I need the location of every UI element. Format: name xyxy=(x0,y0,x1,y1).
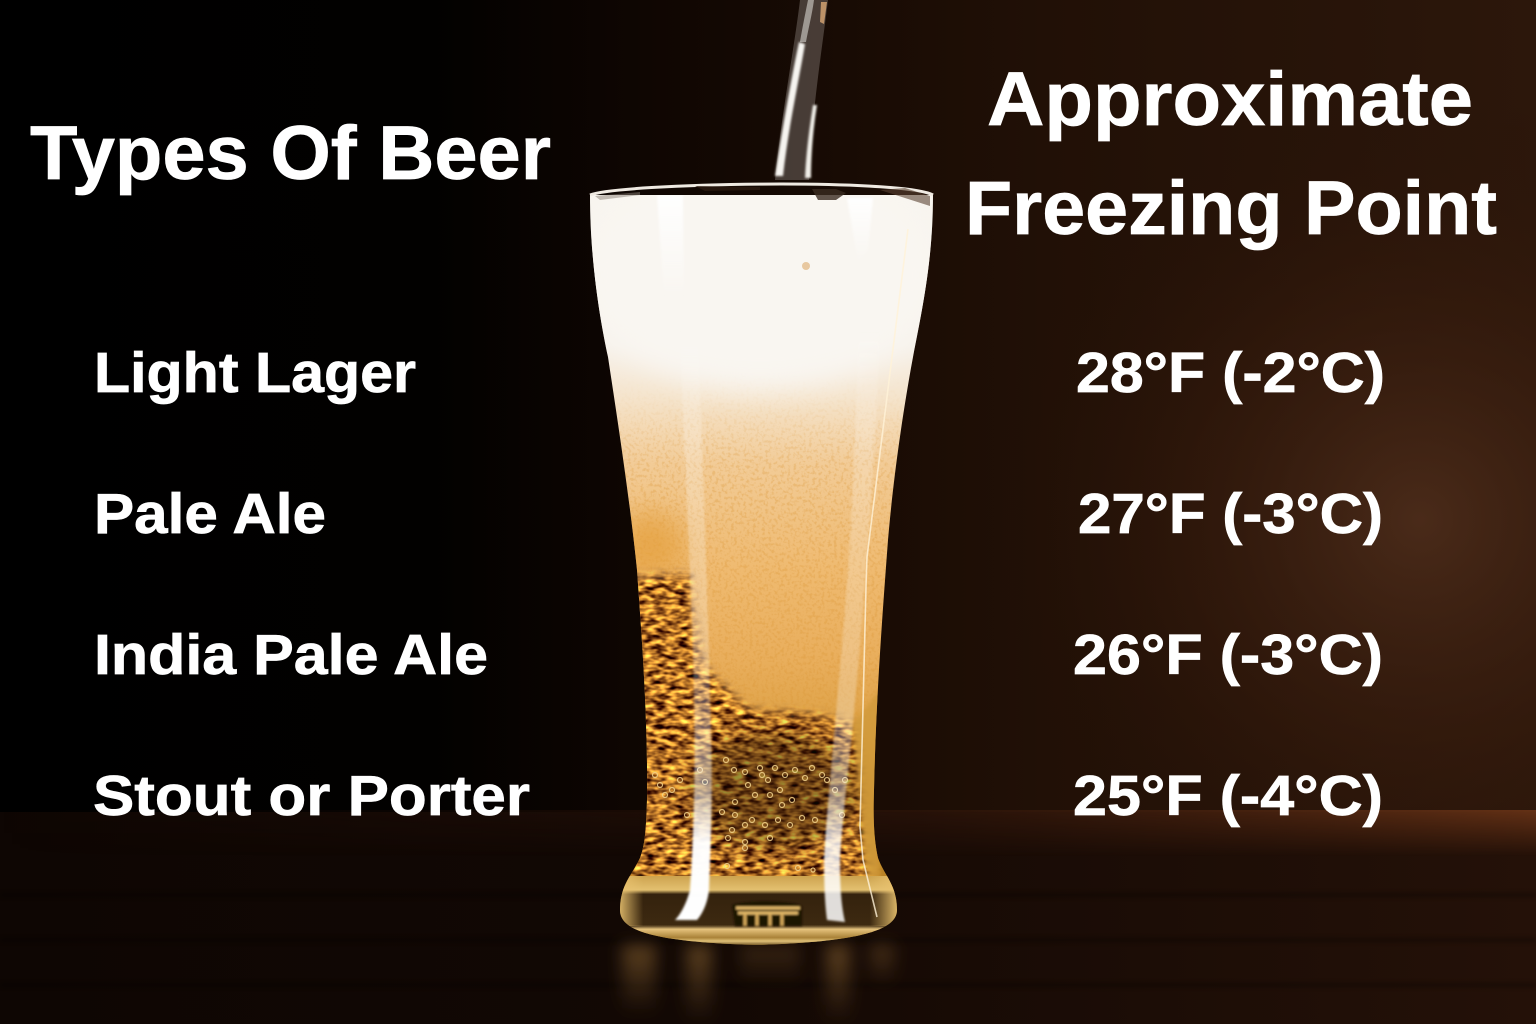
glass base xyxy=(615,876,900,946)
background: wooden table xyxy=(0,810,1536,1024)
list: freezing points: 28°F (-2°C) xyxy=(1076,341,1385,405)
icon: beer glass xyxy=(575,160,945,946)
foam spot xyxy=(802,262,810,270)
list: beer types: India Pale Ale xyxy=(94,623,488,687)
list: freezing points: 27°F (-3°C) xyxy=(1078,482,1383,546)
beer body with foam xyxy=(590,195,933,945)
deepest shadow in beer xyxy=(690,732,860,848)
list: freezing points: 25°F (-4°C) xyxy=(1073,764,1383,828)
lens detail in base xyxy=(732,901,802,926)
heading: Approximate Freezing Point xyxy=(965,57,1497,251)
base side glow xyxy=(618,876,898,926)
glass highlight band right xyxy=(822,402,876,924)
bubbles xyxy=(652,758,848,874)
mottled foam grain xyxy=(617,405,903,698)
list: freezing points: 26°F (-3°C) xyxy=(1073,623,1383,687)
glass reflection on table xyxy=(622,945,894,1024)
glass highlight upper right xyxy=(848,198,872,221)
heading: Approximate Freezing Point: Approximate xyxy=(987,57,1473,142)
dark carbonated beer region xyxy=(630,568,872,876)
list: beer types: Pale Ale xyxy=(94,482,326,546)
list: beer types: Stout or Porter xyxy=(93,764,530,828)
heading: Approximate Freezing Point: Freezing Point xyxy=(965,166,1497,251)
foam top xyxy=(590,210,933,400)
thin reflection line xyxy=(860,229,908,917)
orange foam patch left xyxy=(616,511,684,579)
heading: Types Of Beer: Types Of Beer xyxy=(30,111,551,196)
list: beer types: Light Lager xyxy=(94,341,416,405)
list: freezing points xyxy=(1073,341,1385,828)
glass highlight band left xyxy=(675,330,712,920)
golden right strip xyxy=(852,690,880,880)
icon: beer stream pouring xyxy=(775,0,828,180)
glass rim xyxy=(590,184,933,206)
list: beer types xyxy=(93,341,530,828)
glass highlight upper left xyxy=(658,196,682,231)
